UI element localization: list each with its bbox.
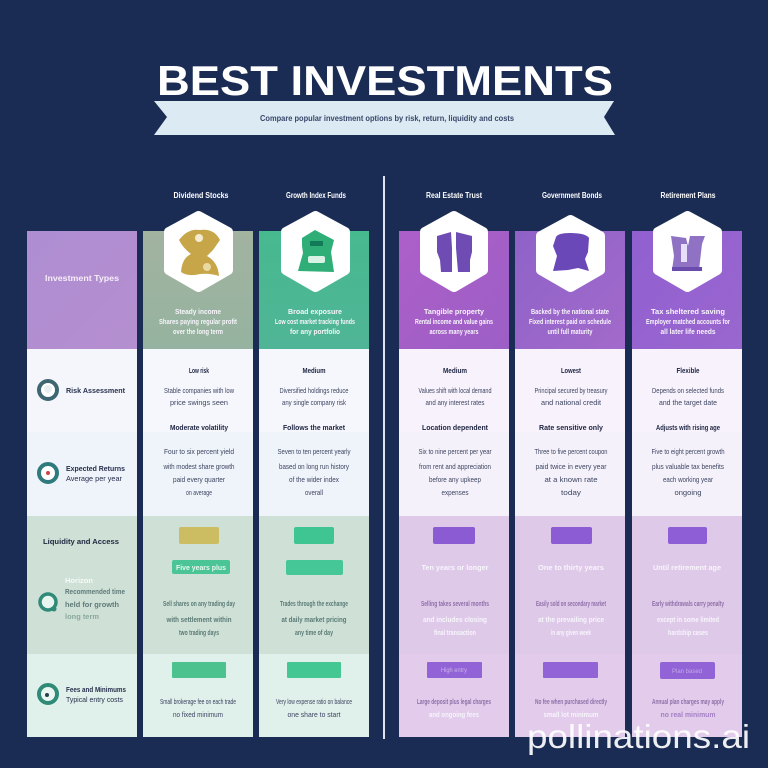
panel: index funds column [259,191,369,737]
header text: Backed by the national state [531,307,609,316]
return text: today [561,488,581,497]
horizon text: in any given week [551,628,592,637]
return text: of the wider index [289,475,339,484]
cost text [417,697,491,719]
return text [534,447,608,497]
panel: bonds column [399,191,509,737]
row label: costs: Typical entry costs [66,695,123,704]
header text: Steady income [175,307,221,316]
horizon text: final transaction [434,628,476,637]
horizon pill: Five years plus [176,563,226,572]
header text: over the long term [173,327,223,336]
cost text [160,697,236,719]
watermark: pollinations.ai [527,718,750,755]
cost text: and ongoing fees [429,710,479,719]
icon: gold hexagon [169,216,228,287]
header text [646,307,730,336]
return text: from rent and appreciation [419,462,491,471]
risk text: and national credit [541,398,602,407]
header text: Low cost market tracking funds [275,317,355,326]
row label: risk: Risk Assessment [66,386,125,395]
icon: risk [39,381,57,399]
return text: paid every quarter [173,475,225,484]
horizon text [280,599,348,637]
return text: with modest share growth [163,462,234,471]
horizon text: Trades through the exchange [280,599,348,608]
horizon text: Sell shares on any trading day [163,599,236,608]
column label: Growth Index Funds [286,191,346,200]
risk text: Location dependent [422,423,488,432]
icon: purple hexagon two [541,220,600,287]
return text [278,447,351,497]
panel: row labels column: Investment Types [45,273,119,283]
cost pill [427,662,482,678]
horizon text: at the prevailing price [538,615,604,624]
liquidity pill [668,527,707,544]
liquidity pill [433,527,475,544]
horizon text [163,599,236,637]
risk text: Low risk [189,366,210,375]
cost pill: High entry [441,668,467,674]
icon: purple hexagon one [425,216,483,287]
horizon text: at daily market pricing [282,615,347,624]
risk text: Principal secured by treasury [534,386,608,395]
icon: costs [39,685,57,703]
return text: on average [186,488,212,497]
cost text [276,697,352,719]
row label: return: Expected Returns [66,464,125,473]
subtitle ribbon: Compare popular investment options by risk, return, liquidity and costs [260,114,515,123]
panel: reit column [632,191,742,737]
header text: Shares paying regular profit [159,317,237,326]
header text: for any portfolio [290,327,340,336]
column label: Government Bonds [542,191,602,200]
header text: Tangible property [424,307,485,316]
risk text: Depends on selected funds [652,386,724,395]
risk text [280,366,348,432]
return text: at a known rate [544,475,598,484]
risk text [164,366,234,432]
return text: Five to eight percent growth [652,447,724,456]
panel: row labels column [27,231,137,737]
column label: Dividend Stocks [174,191,229,200]
horizon text: hardship cases [668,628,708,637]
risk text: Stable companies with low [164,386,234,395]
header text [159,307,237,336]
return text: ongoing [674,488,702,497]
header text [529,307,611,336]
return text [652,447,724,497]
cost text: small lot minimum [544,710,599,719]
icon: purple hexagon three [658,216,717,287]
row label: costs: Fees and Minimums [66,685,126,694]
risk text: Moderate volatility [170,423,229,432]
row label: liquidity: Liquidity and Access [43,537,119,546]
horizon text [536,599,606,637]
cost pill [543,662,598,678]
icon: return [39,464,57,482]
risk text: Values shift with local demand [418,386,492,395]
horizon text [421,599,489,637]
header text: Rental income and value gains [415,317,493,326]
return text: Three to five percent coupon [534,447,608,456]
cost text: Large deposit plus legal charges [417,697,491,706]
return text [163,447,234,497]
risk text: price swings seen [170,398,228,407]
header text: all later life needs [660,327,716,336]
row label: return: Average per year [66,474,122,483]
horizon pill [172,560,230,574]
horizon text: two trading days [179,628,219,637]
header text: across many years [430,327,478,336]
panel: etf column [515,191,625,737]
liquidity pill [551,527,592,544]
risk text: Adjusts with rising age [656,423,720,432]
return text [418,447,492,497]
centre divider [383,176,385,739]
risk text: and the target date [659,398,717,407]
return text: expenses [442,488,469,497]
risk text: Flexible [676,366,700,375]
header text: until full maturity [548,327,593,336]
horizon text: except in some limited [657,615,719,624]
horizon text: Early withdrawals carry penalty [652,599,725,608]
liquidity pill [179,527,219,544]
header text: Broad exposure [288,307,342,316]
header text: Fixed interest paid on schedule [529,317,611,326]
horizon pill text: One to thirty years [538,563,604,572]
risk text [652,366,724,432]
return text: Four to six percent yield [164,447,234,456]
subtitle ribbon [154,101,615,135]
header text: Employer matched accounts for [646,317,730,326]
cost text: no fixed minimum [173,710,223,719]
header text [415,307,493,336]
row label: time horizon: Recommended time [65,587,125,596]
cost text: No fee when purchased directly [535,697,608,706]
risk text: Medium [302,366,326,375]
risk text: Rate sensitive only [539,423,604,432]
horizon pill text: Until retirement age [653,563,721,572]
row label: time horizon [65,576,125,621]
cost text: Very low expense ratio on balance [276,697,352,706]
column label: Retirement Plans [660,191,716,200]
return text: paid twice in every year [536,462,607,471]
cost text: Annual plan charges may apply [652,697,725,706]
panel: stocks column [143,191,253,737]
return text: Seven to ten percent yearly [278,447,351,456]
return text: each working year [663,475,713,484]
horizon text: Selling takes several months [421,599,489,608]
risk text: Diversified holdings reduce [280,386,348,395]
column label: Real Estate Trust [426,191,482,200]
return text: based on long run history [279,462,349,471]
row label: return [66,464,125,483]
icon: time horizon [40,594,56,612]
row label: costs [66,685,126,704]
horizon text: and includes closing [423,615,487,624]
cost pill [660,662,715,679]
cost text: one share to start [288,710,341,719]
risk text: and any interest rates [426,398,485,407]
risk text: any single company risk [282,398,346,407]
row label: time horizon: Horizon [65,576,93,585]
horizon text: any time of day [295,628,334,637]
return text: plus valuable tax benefits [652,462,724,471]
risk text [534,366,608,432]
liquidity pill [294,527,334,544]
icon: green hexagon [286,216,345,287]
cost pill [287,662,341,678]
header text: Tax sheltered saving [651,307,725,316]
cost pill [172,662,226,678]
return text: overall [305,488,323,497]
risk text [418,366,492,432]
horizon text: with settlement within [166,615,232,624]
title: BEST INVESTMENTS [157,57,613,104]
horizon pill text: Ten years or longer [422,563,489,572]
header text [275,307,355,336]
cost text [535,697,608,719]
horizon text [652,599,725,637]
return text: Six to nine percent per year [418,447,492,456]
return text: before any upkeep [429,475,481,484]
cost pill: Plan based [672,669,702,675]
row label: time horizon: held for growth [65,600,119,609]
row label: time horizon: long term [65,612,99,621]
cost text: no real minimum [660,710,716,719]
horizon pill [286,560,343,575]
horizon text: Easily sold on secondary market [536,599,606,608]
cost text: Small brokerage fee on each trade [160,697,236,706]
risk text: Follows the market [283,423,345,432]
cost text [652,697,725,719]
risk text: Medium [443,366,467,375]
risk text: Lowest [561,366,581,375]
